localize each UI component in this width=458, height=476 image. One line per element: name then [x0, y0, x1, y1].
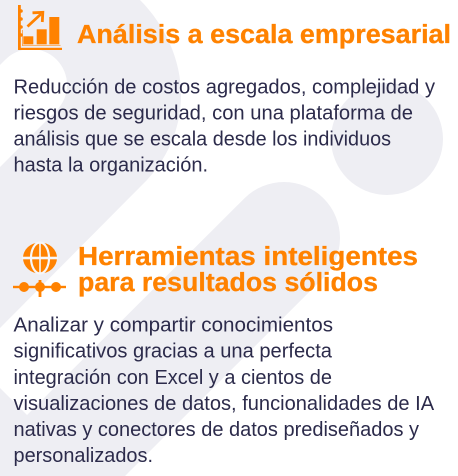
heading: enterprise analytics: Análisis a escala empresarial [77, 21, 451, 49]
icon: bar chart with arrow [18, 5, 62, 50]
text block: smart tools: personalizados. [14, 444, 153, 467]
text block: enterprise analytics: hasta la organización. [14, 153, 208, 176]
text block: smart tools: integración con Excel y a cientos de [14, 366, 332, 389]
text block: enterprise analytics: análisis que se escala desde los individuos [14, 127, 391, 150]
text block: enterprise analytics: riesgos de seguridad, con una plataforma de [14, 101, 413, 124]
text block: smart tools: nativas y conectores de datos prediseñados y [14, 418, 420, 441]
heading: smart tools: Herramientas inteligentes [78, 243, 418, 271]
heading: smart tools: para resultados sólidos [78, 269, 378, 297]
text block: enterprise analytics: Reducción de costos agregados, complejidad y [14, 75, 436, 98]
text block: smart tools: Analizar y compartir conocimientos [14, 314, 333, 337]
text block: smart tools: visualizaciones de datos, funcionalidades de IA [14, 392, 434, 415]
section: enterprise analytics [14, 5, 451, 176]
icon: globe with network nodes [13, 242, 66, 297]
section: smart tools [13, 242, 439, 467]
text block: smart tools: significativos gracias a una perfecta [14, 340, 333, 363]
